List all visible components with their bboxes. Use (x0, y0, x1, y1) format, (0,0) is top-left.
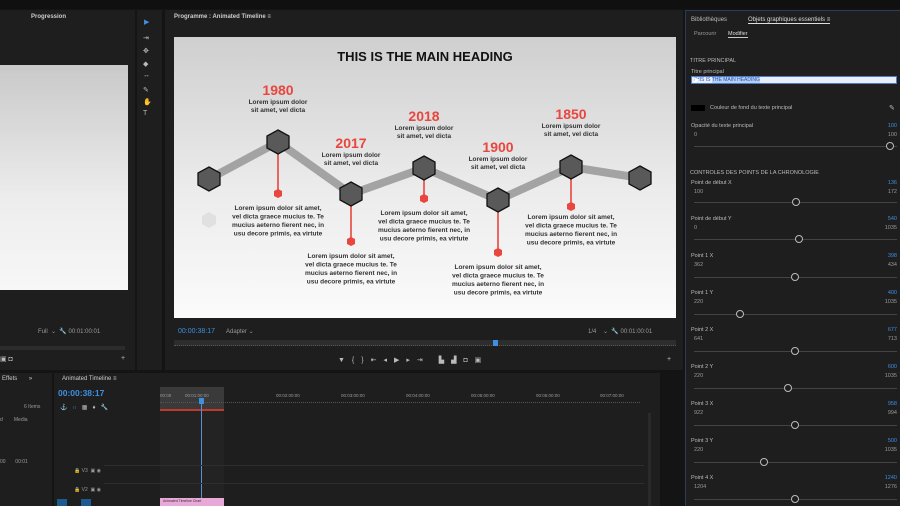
short captions: Lorem ipsum dolor (395, 125, 454, 132)
sliders (691, 180, 897, 206)
red dots (274, 189, 575, 257)
ghost hexagon (202, 212, 216, 228)
panel: essential graphics: 220 (694, 447, 703, 453)
panel: effects: 6 Items (24, 404, 40, 410)
long paragraphs: Lorem ipsum dolor sit amet, (307, 253, 395, 260)
long paragraphs: Lorem ipsum dolor sit amet, (234, 205, 322, 212)
panel: essential graphics: Point 4 X (691, 475, 713, 481)
panel: essential graphics: 994 (888, 410, 897, 416)
panel: timeline (54, 373, 660, 506)
long paragraphs: vel dicta graece mucius te. Te (452, 272, 544, 280)
panel: essential graphics: 641 (694, 336, 703, 342)
panel: essential graphics: Point 1 Y (691, 290, 713, 296)
short captions (249, 99, 601, 171)
long paragraphs: vel dicta graece mucius te. Te (525, 222, 617, 230)
panel: effects: 00 00:01 (0, 459, 28, 465)
short captions: Lorem ipsum dolor (249, 99, 308, 106)
panel: essential graphics: 922 (694, 410, 703, 416)
panel: essential graphics: CONTROLES DES POINTS DE LA CHRONOLOGIE (690, 170, 819, 176)
panel: essential graphics: Point 2 X (691, 327, 713, 333)
years: 1900 (482, 139, 514, 155)
program frame: timeline infographic (174, 37, 676, 318)
panel: timeline: 00:03:00:00 (341, 393, 365, 398)
opacity slider: Opacité du texte principal (691, 123, 753, 129)
long paragraphs: mucius aeterno fierent nec, in (305, 270, 397, 277)
program header: Programme : Animated Timeline ≡ (174, 14, 271, 20)
panel: tools: ⇥ (143, 35, 149, 42)
sliders: 172 (888, 189, 897, 195)
short captions: Lorem ipsum dolor (542, 123, 601, 130)
top menu bar (0, 0, 900, 9)
panel: program monitor: + (667, 356, 671, 363)
opacity slider: 100 (888, 132, 897, 138)
panel: essential graphics: 398 (888, 253, 897, 259)
panel: timeline: 00:04:00:00 (406, 393, 430, 398)
long paragraphs: usu decore primis, ea virtute (380, 236, 469, 242)
panel: tools (137, 10, 162, 370)
panel: essential graphics: Point 3 X (691, 401, 713, 407)
color swatch (691, 105, 705, 111)
short captions: sit amet, vel dicta (251, 107, 305, 114)
connecting line (209, 142, 640, 200)
short captions: Lorem ipsum dolor (322, 152, 381, 159)
panel: essential graphics: 677 (888, 327, 897, 333)
short captions: sit amet, vel dicta (397, 133, 451, 140)
panel: tools: ◆ (143, 61, 148, 68)
panel: tools: ✥ (143, 48, 149, 55)
panel: source monitor (0, 10, 135, 370)
panel: timeline: ⚓∩▦♦🔧 (60, 405, 113, 411)
long paragraphs: mucius aeterno fierent nec, in (232, 222, 324, 229)
long paragraphs: Lorem ipsum dolor sit amet, (527, 214, 615, 221)
short captions: Lorem ipsum dolor (469, 156, 528, 163)
tabs: Bibliothèques (691, 17, 727, 23)
scrubber (174, 340, 676, 346)
panel: effects: Effets » (2, 376, 32, 382)
panel: timeline: 00:07:00:00 (600, 393, 624, 398)
panel: essential graphics: 713 (888, 336, 897, 342)
short captions: sit amet, vel dicta (324, 160, 378, 167)
panel: essential graphics: 362 (694, 262, 703, 268)
panel: essential graphics: Point 3 Y (691, 438, 713, 444)
panel: essential graphics: 434 (888, 262, 897, 268)
source controls: Full ⌄ 🔧 00:01:00:01 (38, 329, 100, 335)
panel: essential graphics: Point 1 X (691, 253, 713, 259)
long paragraphs: mucius aeterno fierent nec, in (452, 281, 544, 288)
panel: timeline: 🔒 V3 ▣ ◉ (74, 468, 101, 474)
panel: essential graphics: Parcourir (694, 31, 716, 37)
panel: source monitor: + (121, 355, 125, 362)
source image (0, 65, 128, 290)
long paragraphs: Lorem ipsum dolor sit amet, (454, 264, 542, 271)
panel: essential graphics: 1035 (885, 447, 897, 453)
long paragraphs: vel dicta graece mucius te. Te (232, 214, 324, 220)
long paragraphs: usu decore primis, ea virtute (307, 278, 396, 286)
panel: effects (0, 373, 52, 506)
sliders: Point de début X (691, 180, 732, 186)
years (262, 82, 587, 155)
panel: essential graphics: Couleur de fond du texte principal (710, 105, 792, 111)
controls row: 00:00:38:17 (178, 328, 215, 335)
years: 2018 (408, 108, 440, 124)
panel: tools: ↔ (143, 72, 150, 79)
source header: Progression (31, 14, 66, 20)
panel: timeline: 🔒 V2 ▣ ◉ (74, 487, 101, 493)
long paragraphs (232, 205, 617, 296)
long paragraphs: mucius aeterno fierent nec, in (525, 231, 617, 238)
panel: timeline: 00:05:00:00 (471, 393, 495, 398)
long paragraphs: mucius aeterno fierent nec, in (378, 227, 470, 234)
long paragraphs: usu decore primis, ea virtute (234, 230, 323, 238)
panel: essential graphics: 958 (888, 401, 897, 407)
panel: essential graphics: 1035 (885, 299, 897, 305)
title section: TITRE PRINCIPAL (690, 58, 736, 64)
panel: source monitor: ▣ ◘ (0, 356, 13, 363)
panel: essential graphics: 1276 (885, 484, 897, 490)
panel: essential graphics: 1240 (885, 475, 897, 481)
short captions: sit amet, vel dicta (544, 131, 598, 138)
panel: tools: ✋ (143, 99, 152, 106)
panel: essential graphics: 400 (888, 290, 897, 296)
years: 1850 (555, 106, 587, 122)
panel: essential graphics: THIS IS THE MAIN HEADING (693, 77, 760, 83)
transport controls: ▼{}⇤◂▶▸⇥ ▙▟◘▣ (338, 357, 488, 364)
long paragraphs: vel dicta graece mucius te. Te (378, 218, 470, 226)
sliders: 100 (694, 189, 703, 195)
panel: essential graphics (685, 10, 900, 506)
panel: essential graphics: Point 2 Y (691, 364, 713, 370)
clip: Animated Timeline Chart (163, 499, 201, 503)
panel: timeline: 00:02:00:00 (276, 393, 300, 398)
long paragraphs: usu decore primis, ea virtute (454, 290, 543, 296)
panel: essential graphics: Objets graphiques essentiels ≡ (748, 17, 830, 23)
panel: essential graphics: 0 (694, 225, 697, 231)
panel: effects: d Media (0, 417, 28, 423)
panel: essential graphics: 1204 (694, 484, 706, 490)
long paragraphs: vel dicta graece mucius te. Te (305, 262, 397, 268)
hexagon nodes (198, 130, 651, 212)
panel: timeline: 00:06:00:00 (536, 393, 560, 398)
work area (160, 387, 224, 409)
tracks (104, 465, 644, 466)
clip (160, 498, 224, 506)
panel: program monitor: 1/4 ⌄ 🔧 00:01:00:01 (588, 329, 652, 335)
panel: program monitor: Adapter ⌄ (226, 329, 254, 335)
long paragraphs: Lorem ipsum dolor sit amet, (380, 210, 468, 217)
panel: tools: ▶ (144, 19, 149, 26)
timeline header: Animated Timeline ≡ (62, 376, 117, 382)
sliders: 136 (888, 180, 897, 186)
panel: essential graphics: Titre principal (691, 69, 724, 75)
panel: essential graphics: Modifier (728, 31, 748, 37)
opacity slider (691, 123, 897, 150)
panel: tools: ✎ (143, 87, 149, 94)
long paragraphs: usu decore primis, ea virtute (527, 240, 616, 246)
panel: essential graphics: 220 (694, 373, 703, 379)
panel: essential graphics: 540 (888, 216, 897, 222)
panel: essential graphics: 220 (694, 299, 703, 305)
years: 2017 (335, 135, 367, 151)
panel: essential graphics: ✎ (889, 105, 895, 112)
panel: essential graphics: Point de début Y (691, 216, 732, 222)
panel: essential graphics: 1035 (885, 373, 897, 379)
panel: program monitor (165, 10, 683, 370)
cursor: ➤ (692, 75, 700, 86)
years: 1980 (262, 82, 294, 98)
red stems (278, 142, 571, 251)
panel: essential graphics: 500 (888, 438, 897, 444)
short captions: sit amet, vel dicta (471, 164, 525, 171)
panel: essential graphics: 600 (888, 364, 897, 370)
playhead (199, 398, 204, 404)
panel: essential graphics: 1035 (885, 225, 897, 231)
ruler labels: 00:00 00:01:00:00 (160, 393, 209, 398)
panel: tools: T (143, 110, 147, 117)
main heading: THIS IS THE MAIN HEADING (337, 49, 513, 64)
opacity slider: 100 (888, 123, 897, 129)
opacity slider: 0 (694, 132, 697, 138)
panel: timeline: 00:00:38:17 (58, 388, 104, 398)
